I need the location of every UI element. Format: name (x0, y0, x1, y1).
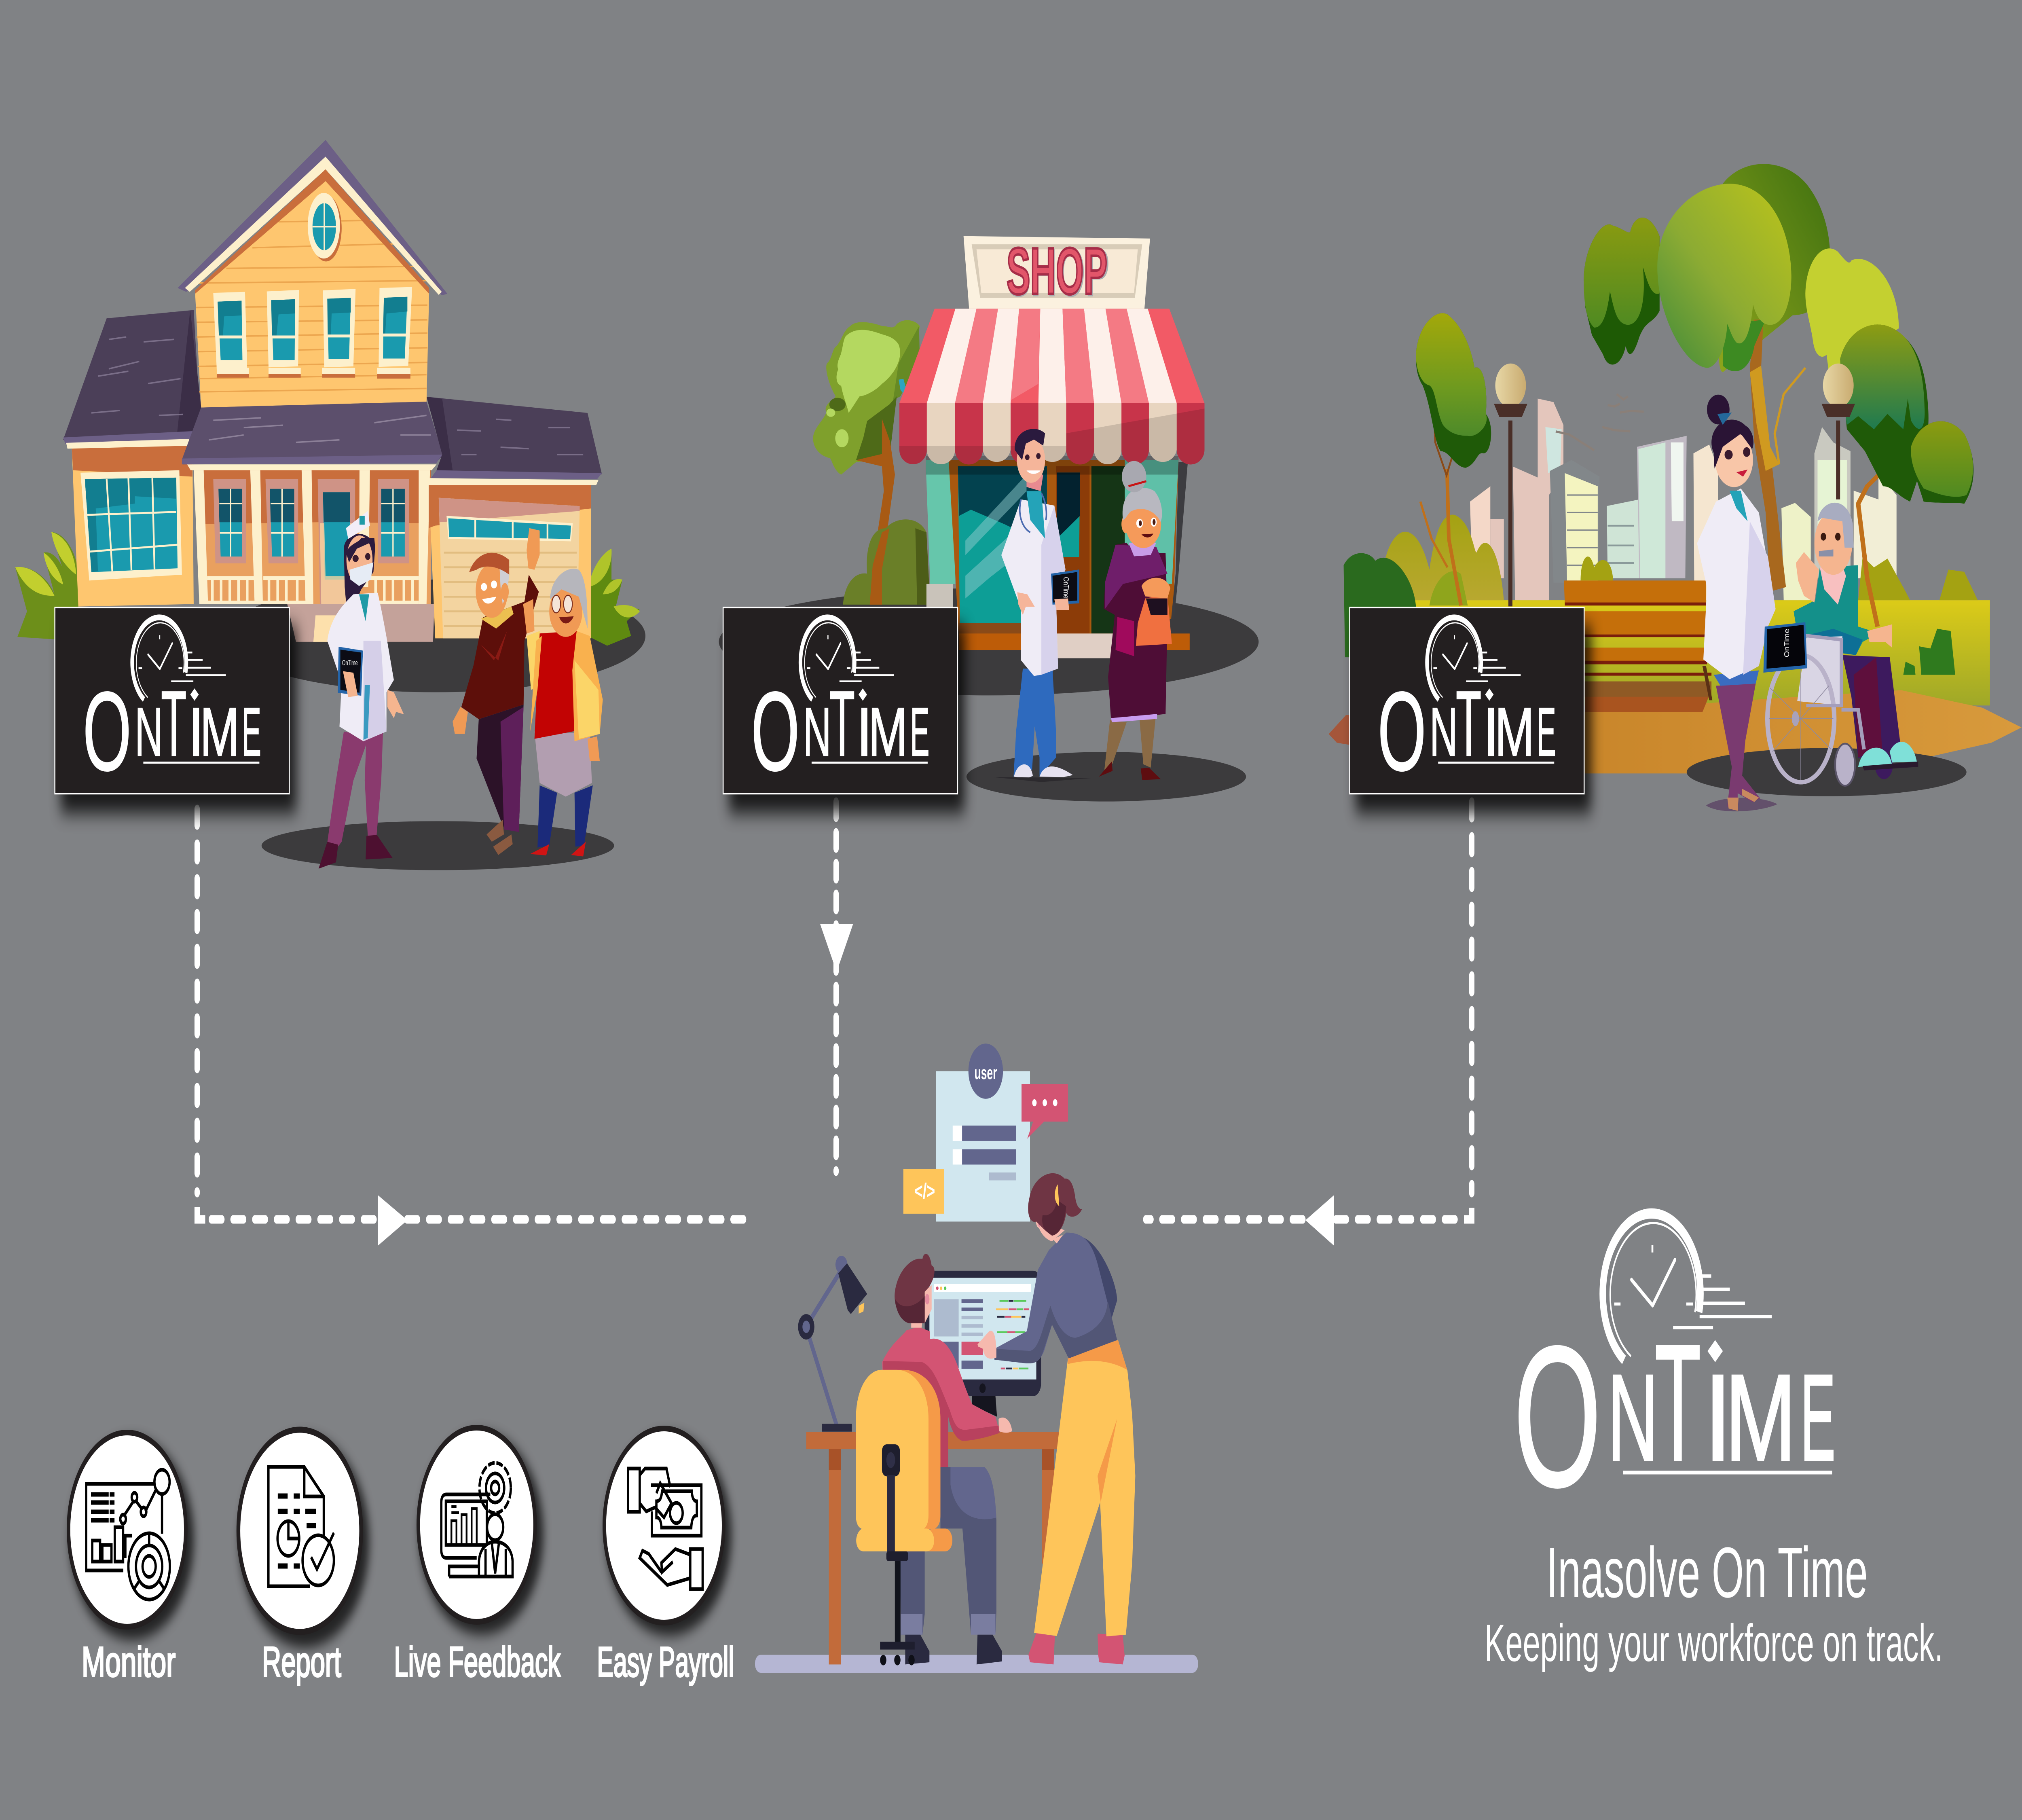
right roof (427, 397, 602, 474)
big tree main crown (1657, 184, 1791, 371)
logo wordmark: M (200, 694, 239, 771)
logo wordmark: E (1537, 694, 1556, 771)
left roof (63, 310, 201, 440)
logo wordmark: N (803, 694, 831, 771)
trunk (1750, 320, 1786, 591)
logo wordmark: O (83, 669, 131, 794)
right tree (1840, 324, 1973, 626)
storefront (926, 456, 1190, 658)
connector: right route (1146, 802, 1472, 1246)
sign (964, 233, 1150, 311)
brand wordmark: M (1725, 1349, 1796, 1486)
standing woman (977, 1173, 1135, 1664)
elderly woman with bag (1099, 461, 1172, 780)
clipboard (338, 647, 363, 696)
doctor (993, 429, 1093, 782)
coat (327, 593, 394, 741)
brand title: Inasolve On Time (1546, 1532, 1868, 1613)
left wing wall (72, 440, 194, 607)
logo wordmark: T (1456, 672, 1481, 776)
circle (418, 1428, 535, 1622)
scene: house with nurse and elderly couple (15, 140, 645, 870)
connector: centre route (820, 802, 853, 1172)
scene: shop with doctor and elderly woman (719, 233, 1258, 802)
upper windows (213, 287, 412, 370)
hair back (344, 534, 375, 648)
porch wall (202, 469, 431, 604)
park doctor (1697, 395, 1807, 811)
ground shadow: people (967, 752, 1246, 802)
logo diamond and underline (143, 688, 259, 764)
front roof (182, 402, 443, 464)
icon: dashboard with gauge (86, 1470, 170, 1600)
ground path (1329, 690, 2022, 773)
icon group: Live Feedback (394, 1428, 560, 1686)
elderly man (453, 528, 540, 855)
label: Monitor (82, 1638, 176, 1686)
park doctor: OnTime (1783, 629, 1791, 657)
icon: monitor, gear and person (441, 1463, 513, 1577)
brand tagline: Keeping your workforce on track. (1485, 1613, 1943, 1672)
columns (194, 470, 430, 604)
foundation (287, 604, 434, 642)
wheelchair and patient (1768, 503, 1918, 786)
icon group: Monitor (68, 1433, 194, 1686)
scene: team at computer (755, 1043, 1198, 1673)
left lamp (1494, 364, 1527, 606)
scene: park with doctor and wheelchair patient (1329, 164, 2022, 811)
face (347, 535, 372, 584)
seated man (882, 1254, 1012, 1664)
tree (813, 320, 930, 605)
logo wordmark: O (1378, 669, 1426, 794)
user form card: user (974, 1063, 997, 1083)
ground shadow: people (262, 821, 614, 870)
right lamp (1821, 364, 1855, 499)
circle shadow (420, 1433, 544, 1635)
circle shadow (70, 1438, 194, 1640)
brand wordmark: E (1800, 1349, 1836, 1486)
brand wordmark: O (1514, 1304, 1601, 1528)
house body (63, 140, 602, 642)
ground shadow: house (225, 580, 645, 692)
garage door (439, 498, 580, 638)
upper gable wall (195, 180, 429, 408)
circle shadow (606, 1434, 732, 1636)
logo wordmark: E (242, 694, 261, 771)
bush right (588, 549, 640, 646)
arrow: left (1305, 1195, 1334, 1246)
icon group: Report (238, 1430, 369, 1686)
logo diamond and underline (812, 688, 928, 764)
brand diamond and underline (1623, 1340, 1832, 1475)
desk (806, 1432, 1061, 1664)
label: Report (262, 1638, 341, 1686)
logo clock (132, 618, 226, 700)
garage wall (429, 478, 599, 485)
user form card (936, 1043, 1030, 1221)
city skyline (1470, 398, 1897, 600)
ground shadow: shop (719, 588, 1258, 695)
park bench (1564, 580, 1712, 700)
sign: SHOP (1007, 234, 1107, 308)
logo wordmark: N (135, 694, 163, 771)
left crown (1584, 218, 1660, 365)
brand wordmark: I (1704, 1349, 1732, 1486)
speech bubble (1022, 1084, 1068, 1139)
brand clock (1603, 1213, 1772, 1360)
bird (899, 379, 917, 399)
doctor: OnTime (1062, 577, 1070, 599)
circle (238, 1430, 361, 1632)
railing (207, 576, 419, 604)
awning (899, 309, 1204, 464)
big tree back crown (1718, 164, 1830, 372)
logo wordmark: I (188, 694, 204, 771)
logo wordmark: M (868, 694, 907, 771)
logo wordmark: T (829, 672, 855, 776)
bush left (15, 532, 78, 641)
hands (343, 671, 404, 718)
logo wordmark: N (1430, 694, 1458, 771)
logo wordmark: I (857, 694, 872, 771)
connector: left route (197, 809, 745, 1246)
sign: SHOP (1007, 233, 1110, 311)
meadow (1409, 600, 1990, 705)
arrow: down (820, 924, 853, 972)
hedges (1344, 514, 1978, 675)
icon: report document (269, 1467, 334, 1586)
logo wordmark: E (910, 694, 929, 771)
label: Easy Payroll (597, 1638, 734, 1686)
floor bar (755, 1655, 1198, 1673)
icon: hands exchanging money (628, 1469, 703, 1589)
circle (604, 1428, 723, 1623)
code tag: </> (914, 1179, 935, 1203)
logo panel: park (1350, 607, 1591, 813)
lime crown (1805, 248, 1899, 372)
logo clock (1427, 618, 1521, 700)
logo panel: house (55, 607, 296, 813)
left tree (1416, 313, 1491, 605)
icon group: Easy Payroll (597, 1428, 734, 1686)
nurse: OnTime (342, 658, 358, 667)
logo wordmark: I (1483, 694, 1499, 771)
desk lamp (798, 1256, 867, 1432)
brand wordmark: T (1655, 1310, 1701, 1495)
door (318, 479, 355, 604)
birds (1556, 394, 1644, 450)
code tag (903, 1169, 944, 1214)
brand wordmark: N (1607, 1349, 1658, 1486)
logo diamond and underline (1438, 688, 1554, 764)
foot shadow (1706, 798, 1777, 811)
porch windows (213, 479, 409, 563)
nurse (319, 511, 404, 869)
elderly woman (523, 569, 603, 857)
logo wordmark: M (1495, 694, 1534, 771)
brand logo (1514, 1213, 1836, 1528)
label: Live Feedback (394, 1638, 560, 1686)
logo wordmark: T (161, 672, 187, 776)
ground shadow (1687, 748, 1967, 796)
office chair (856, 1370, 952, 1666)
gable trim (178, 140, 447, 295)
legs (327, 732, 383, 848)
logo clock (800, 618, 894, 700)
monitor (925, 1271, 1041, 1417)
arrow: right (378, 1195, 408, 1246)
cap (346, 511, 370, 539)
circle shadow (240, 1436, 369, 1648)
round window (310, 195, 342, 262)
left wing window (80, 470, 182, 580)
logo wordmark: O (751, 669, 799, 794)
logo panel: shop (723, 607, 964, 813)
circle (68, 1433, 186, 1627)
